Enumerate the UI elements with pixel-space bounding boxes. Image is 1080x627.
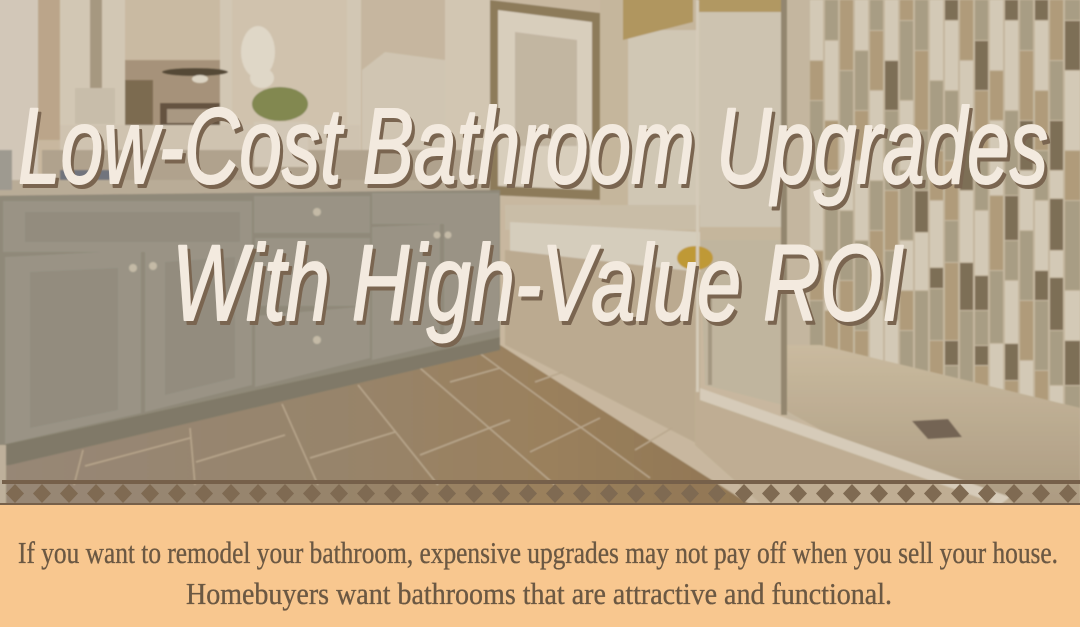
decorative floor lines [74, 352, 672, 485]
intro panel [0, 505, 1080, 627]
decorative mirror base [60, 125, 360, 153]
intro text [18, 535, 1058, 611]
decorative wall, towels and left mirror [0, 0, 38, 200]
border strip [0, 480, 1080, 505]
decorative shower wall [600, 0, 800, 240]
title [18, 85, 1048, 343]
decorative tile wall [785, 0, 1080, 420]
decorative curb front [695, 388, 1040, 530]
decorative floor [0, 345, 790, 530]
decorative glass door frames [696, 0, 699, 392]
decorative orchid and pot [254, 122, 308, 167]
decorative tub [505, 205, 700, 230]
intro text: Homebuyers want bathrooms that are attractive and functional. [186, 576, 892, 611]
decorative vanity [0, 190, 500, 452]
decorative shower floor and curb [785, 345, 1080, 530]
decorative counter [0, 180, 500, 200]
decorative framed art [490, 0, 620, 210]
decorative plant wall and second mirror [232, 0, 347, 190]
